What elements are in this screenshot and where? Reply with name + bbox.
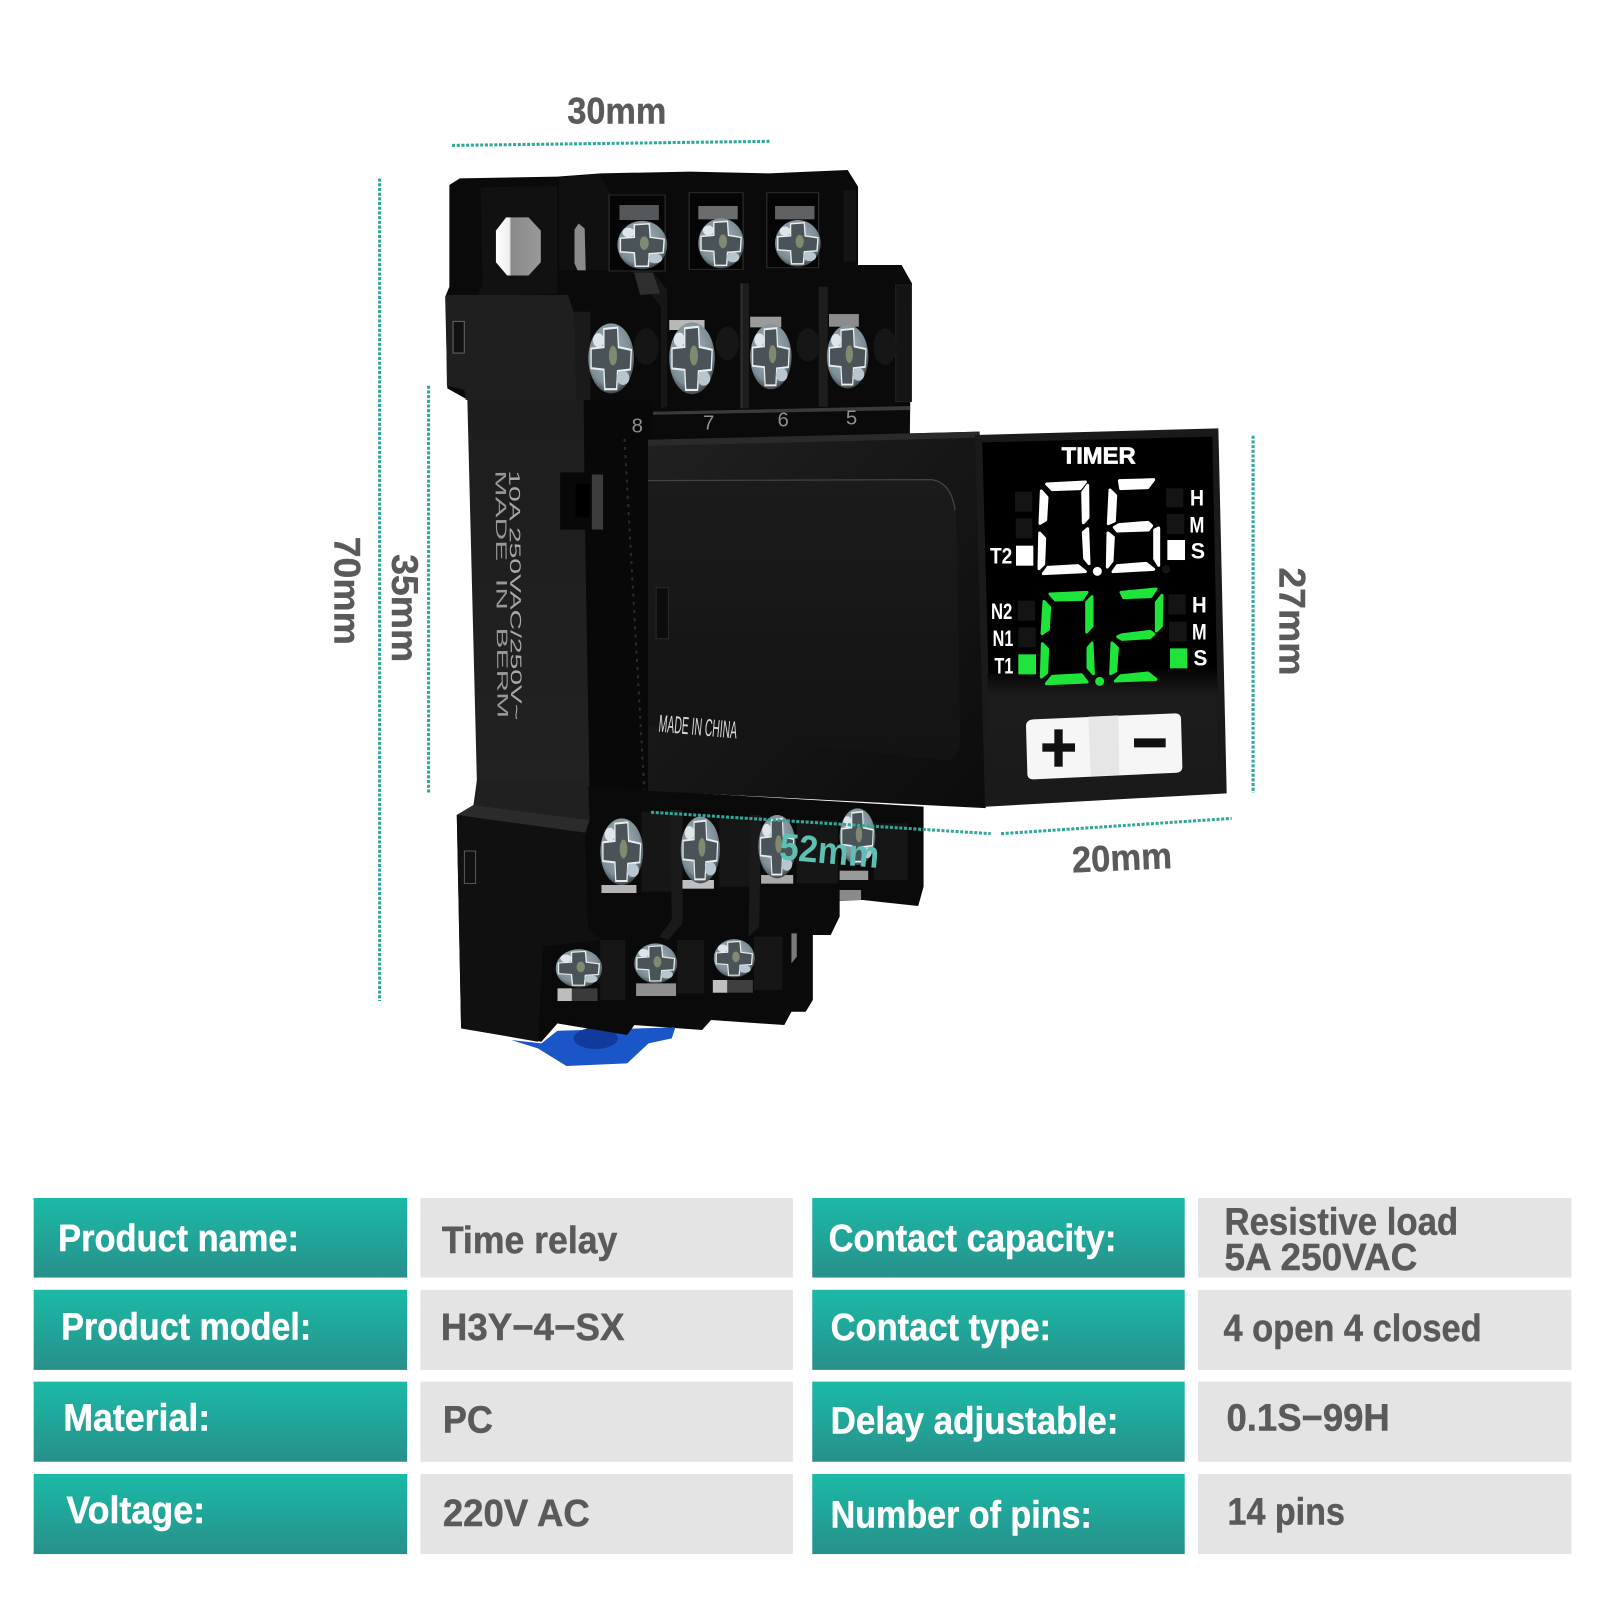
row: product model: H3Y−4−SX bbox=[441, 1306, 624, 1348]
side panel with moulded text: 10A 250VAC/250V~ bbox=[505, 470, 524, 721]
indicator labels: H bbox=[1190, 486, 1204, 511]
indicator labels: H bbox=[1192, 592, 1207, 617]
row: contact capacity: Contact capacity: bbox=[829, 1217, 1116, 1259]
indicator labels bbox=[990, 486, 1207, 678]
digit display: white 0.6 bbox=[1039, 480, 1169, 574]
top left shoulder bbox=[446, 295, 576, 400]
front display panel bbox=[975, 428, 1227, 807]
side panel with moulded text bbox=[467, 400, 645, 808]
dimension: 35mm height: 35mm bbox=[384, 554, 425, 662]
side panel with moulded text: MADE IN BERM bbox=[491, 470, 511, 718]
row: product model: Product model: bbox=[61, 1305, 311, 1347]
indicator labels: T1 bbox=[994, 653, 1013, 678]
relay housing side bbox=[648, 432, 986, 808]
row: delay adjustable: 0.1S−99H bbox=[1227, 1397, 1390, 1439]
row: contact capacity bbox=[812, 1198, 1571, 1278]
row: contact capacity: 5A 250VAC bbox=[1224, 1236, 1417, 1278]
pin numbers: 6 bbox=[778, 410, 789, 432]
dimension: 20mm face width: 20mm bbox=[1071, 835, 1173, 880]
timer heading: TIMER bbox=[1062, 442, 1136, 468]
dimension: 52mm depth: 52mm bbox=[778, 825, 881, 876]
dimension: 27mm face height: 27mm bbox=[1272, 567, 1313, 676]
product: time relay on terminal base bbox=[445, 170, 1227, 1066]
dimension: 70mm height: 70mm bbox=[327, 537, 368, 645]
indicator labels: N1 bbox=[993, 626, 1013, 651]
side notch bbox=[656, 588, 668, 639]
row: contact type: Contact type: bbox=[831, 1306, 1051, 1348]
row: product name bbox=[34, 1198, 793, 1278]
row: contact type: 4 open 4 closed bbox=[1223, 1307, 1482, 1349]
digit display: green 0.2 bbox=[1041, 589, 1162, 684]
dimension: 30mm width bbox=[452, 90, 769, 145]
indicator labels: S bbox=[1193, 646, 1207, 671]
pin numbers: 5 bbox=[846, 407, 857, 429]
row: product model bbox=[34, 1290, 793, 1370]
dimension: 30mm width: 30mm bbox=[567, 90, 666, 131]
row: contact capacity: Resistive load bbox=[1224, 1200, 1458, 1242]
row: voltage: Voltage: bbox=[66, 1489, 205, 1531]
pin numbers: 7 bbox=[703, 413, 714, 435]
indicator squares bbox=[1015, 488, 1187, 674]
buttons: plus and minus bbox=[1026, 713, 1182, 779]
row: product name: Product name: bbox=[58, 1217, 299, 1259]
row: contact type bbox=[812, 1290, 1571, 1370]
relay housing side: MADE IN CHINA bbox=[658, 711, 739, 744]
bottom terminal block bbox=[457, 778, 924, 1066]
row: number of pins bbox=[812, 1474, 1571, 1554]
pin numbers bbox=[632, 407, 857, 438]
row: material: Material: bbox=[63, 1397, 210, 1439]
top terminal block bbox=[445, 170, 912, 480]
indicator labels: T2 bbox=[990, 543, 1012, 568]
dimension: 52mm depth bbox=[651, 812, 991, 876]
blue din clip bbox=[511, 1018, 675, 1066]
row: number of pins: 14 pins bbox=[1228, 1490, 1345, 1532]
central dark column behind relay bbox=[571, 400, 653, 811]
row: product name: Time relay bbox=[442, 1219, 617, 1261]
indicator labels: M bbox=[1189, 512, 1204, 537]
dimension: 20mm face width bbox=[1001, 818, 1232, 880]
row: delay adjustable bbox=[812, 1382, 1571, 1462]
row: number of pins: Number of pins: bbox=[831, 1494, 1092, 1536]
indicator labels: M bbox=[1192, 619, 1207, 644]
row: voltage bbox=[34, 1474, 793, 1554]
row: material: PC bbox=[443, 1398, 493, 1440]
spec table bbox=[34, 1198, 1571, 1554]
mounting hole bbox=[496, 217, 586, 276]
row: material bbox=[34, 1382, 793, 1462]
pin numbers: 8 bbox=[632, 416, 643, 438]
row: voltage: 220V AC bbox=[443, 1492, 590, 1534]
row: delay adjustable: Delay adjustable: bbox=[831, 1399, 1118, 1441]
indicator labels: N2 bbox=[991, 599, 1012, 624]
side clip bbox=[560, 472, 603, 530]
indicator labels: S bbox=[1191, 538, 1205, 563]
